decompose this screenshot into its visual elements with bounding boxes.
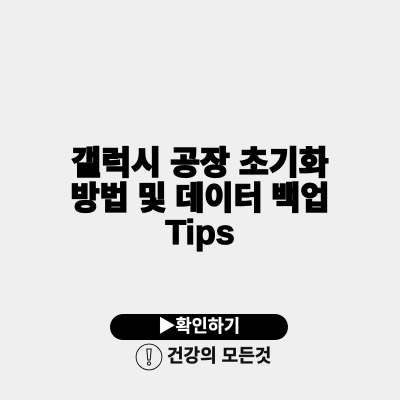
brand label: 건강의 모든것 <box>167 346 271 366</box>
title <box>71 145 329 252</box>
button: confirm: ▶확인하기 <box>158 316 240 336</box>
title: Tips <box>165 214 235 252</box>
button: confirm <box>110 314 288 340</box>
title: 방법 및 데이터 백업 <box>71 180 329 216</box>
icon: exclamation circle <box>136 344 162 370</box>
title: 갤럭시 공장 초기화 <box>71 145 329 181</box>
